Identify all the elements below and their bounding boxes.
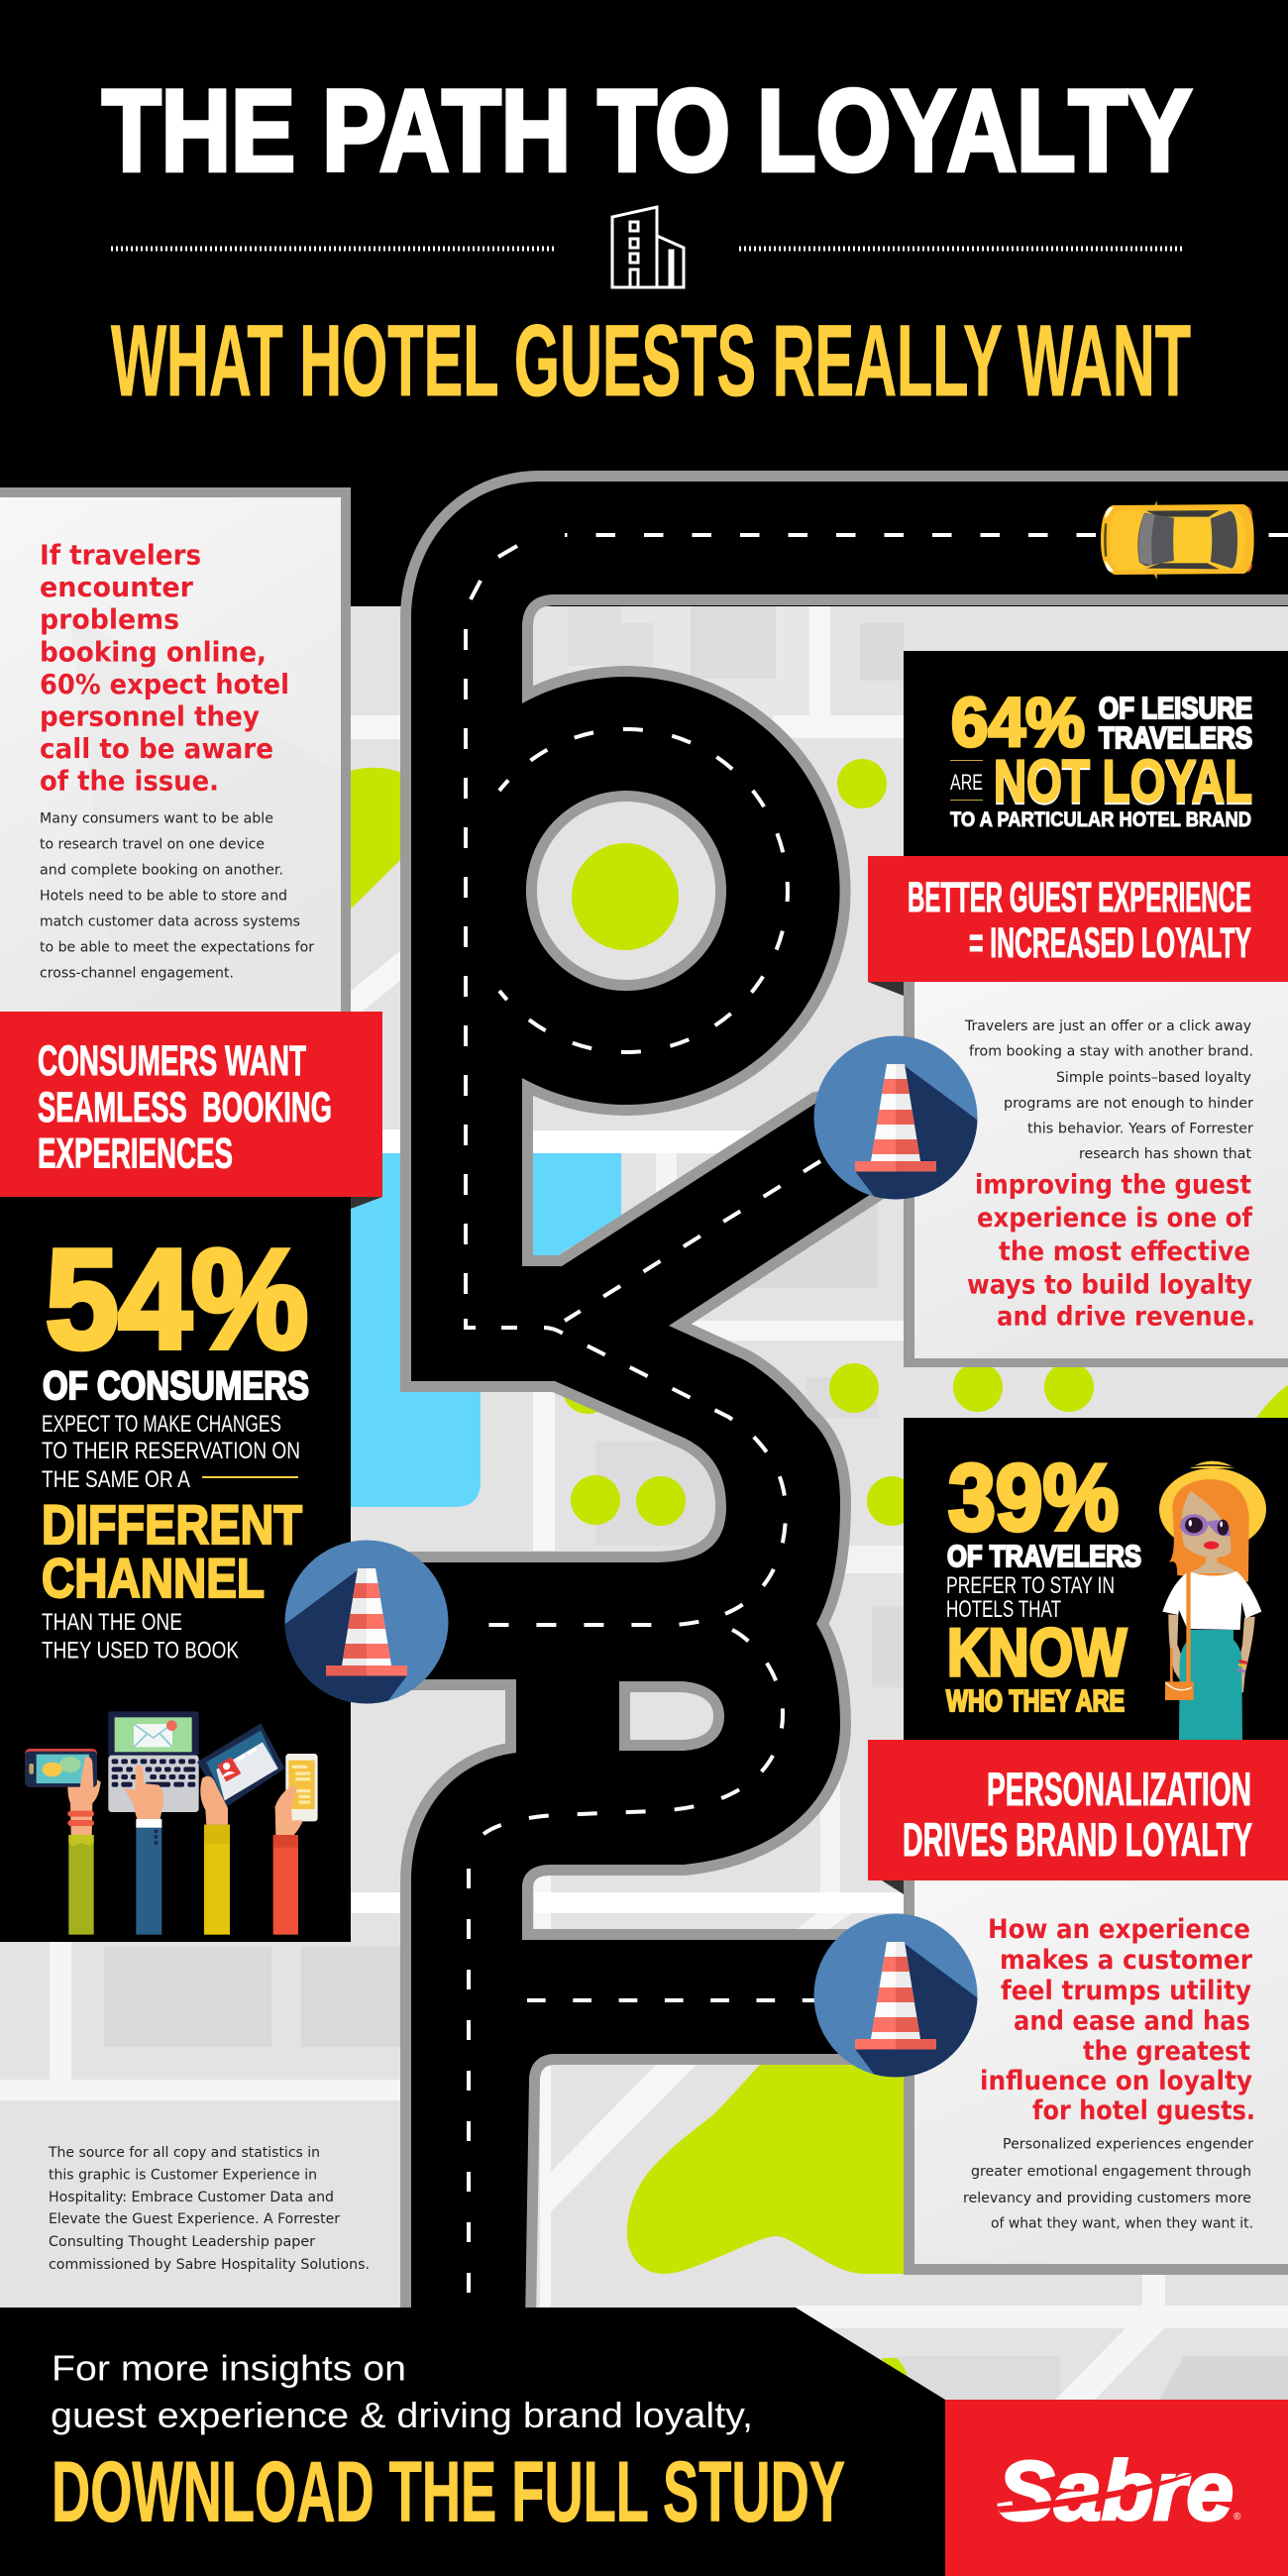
icon: traffic cone 1 <box>814 1036 985 1207</box>
callout text: the greatest <box>1083 2036 1250 2067</box>
panel: 54% stat: THAN THE ONE <box>42 1609 182 1636</box>
panel: 54% stat: DIFFERENT <box>42 1493 302 1556</box>
panel: 54% stat: EXPECT TO MAKE CHANGES <box>42 1411 281 1438</box>
water <box>351 1153 621 1507</box>
panel: seamless booking copy <box>0 487 351 1013</box>
logo: Sabre: Sabre <box>998 2444 1234 2537</box>
device: smartphone <box>275 1754 318 1835</box>
panel: 64% stat: OF LEISURE <box>1099 691 1252 725</box>
panel: 64% stat: 64% <box>951 684 1085 761</box>
footer call to action: guest experience & driving brand loyalty, <box>51 2395 753 2435</box>
body text: to research travel on one device <box>40 837 265 853</box>
panel: 54% stat: THE SAME OR A <box>42 1466 190 1493</box>
dotted divider <box>111 246 1184 252</box>
body text: Many consumers want to be able <box>40 811 273 827</box>
icon: traffic cone 3 <box>814 1914 985 2085</box>
device: laptop <box>108 1711 199 1819</box>
body text: programs are not enough to hinder <box>1004 1096 1253 1112</box>
red banner: better guest experience <box>868 856 1288 996</box>
body text: Travelers are just an offer or a click away <box>964 1019 1251 1034</box>
panel: 39% stat: HOTELS THAT <box>946 1596 1061 1623</box>
panel: personalization copy <box>904 1873 1288 2275</box>
callout text: experience is one of <box>977 1203 1252 1234</box>
body text: to be able to meet the expectations for <box>40 940 314 956</box>
body text: greater emotional engagement through <box>971 2164 1251 2180</box>
panel: 64% stat: TRAVELERS <box>1099 720 1252 755</box>
icon: traffic cone 2 <box>277 1540 448 1711</box>
footer call to action: DOWNLOAD THE FULL STUDY <box>52 2445 845 2540</box>
heading: travelers stat: 60% expect hotel <box>40 668 289 700</box>
heading: travelers stat <box>40 539 289 798</box>
source note: Hospitality: Embrace Customer Data and <box>49 2190 334 2205</box>
callout text: and drive revenue. <box>997 1302 1255 1333</box>
body text: this behavior. Years of Forrester <box>1027 1122 1253 1137</box>
callout text: makes a customer <box>1000 1945 1253 1976</box>
footer call to action: For more insights on <box>52 2348 406 2389</box>
panel: 54% stat: THEY USED TO BOOK <box>42 1637 239 1664</box>
red banner: consumers want: EXPERIENCES <box>38 1129 233 1177</box>
callout text <box>967 1169 1255 1333</box>
illustration: woman in sun hat <box>1159 1461 1266 1740</box>
heading: travelers stat: personnel they <box>40 699 260 733</box>
body text: from booking a stay with another brand. <box>969 1044 1253 1060</box>
body text: Personalized experiences engender <box>1003 2136 1253 2152</box>
red banner: personalization <box>868 1740 1288 1894</box>
road network <box>396 482 1288 2323</box>
red banner: consumers want: SEAMLESS BOOKING <box>38 1084 332 1131</box>
panel: 64% stat: ARE <box>950 770 983 795</box>
panel: 39% stat: PREFER TO STAY IN <box>946 1572 1115 1599</box>
logo: Sabre: ® <box>1234 2512 1241 2522</box>
source note <box>48 2145 370 2273</box>
body text: match customer data across systems <box>40 914 300 930</box>
body text: Hotels need to be able to store and <box>40 889 287 905</box>
source note: this graphic is Customer Experience in <box>49 2167 317 2183</box>
heading: travelers stat: of the issue. <box>40 765 219 798</box>
body text <box>964 1019 1253 1162</box>
callout text: How an experience <box>988 1914 1250 1945</box>
callout text: influence on loyalty <box>980 2066 1252 2096</box>
panel: 39% stat: OF TRAVELERS <box>947 1539 1141 1573</box>
heading: travelers stat: call to be aware <box>40 732 273 765</box>
icon: hands holding devices <box>25 1711 318 1935</box>
device: tablet <box>197 1723 285 1825</box>
source note: commissioned by Sabre Hospitality Solutions. <box>49 2257 370 2273</box>
body text: and complete booking on another. <box>40 863 283 879</box>
logo: Sabre <box>945 2400 1288 2576</box>
road centre dashes <box>466 535 1288 2308</box>
heading: travelers stat: If travelers <box>40 539 201 571</box>
icon: yellow taxi <box>1101 500 1254 580</box>
panel: 39% stat: 39% <box>948 1446 1119 1551</box>
map background <box>0 606 1288 2400</box>
body text: cross-channel engagement. <box>40 966 234 982</box>
icon: hotel building <box>612 207 684 287</box>
body text: Simple points–based loyalty <box>1056 1070 1251 1086</box>
panel: 39% stat: WHO THEY ARE <box>946 1683 1125 1718</box>
callout text: for hotel guests. <box>1032 2095 1255 2126</box>
panel: 54% stat <box>0 1197 351 1942</box>
panel: 54% stat: TO THEIR RESERVATION ON <box>42 1438 300 1464</box>
park blobs <box>351 759 1288 2380</box>
body text <box>963 2136 1253 2231</box>
body text: research has shown that <box>1079 1146 1251 1162</box>
body text <box>40 811 314 982</box>
arm: red sweater <box>273 1835 298 1935</box>
arm: olive <box>67 1777 101 1935</box>
arm: yellow <box>204 1825 230 1935</box>
source note: Elevate the Guest Experience. A Forrester <box>49 2211 340 2227</box>
panel: 64% stat <box>904 651 1288 856</box>
heading: travelers stat: encounter <box>40 571 193 603</box>
callout text: the most effective <box>999 1236 1250 1267</box>
panel: 54% stat: CHANNEL <box>42 1547 265 1609</box>
device: phone <box>25 1749 97 1791</box>
red banner: consumers want: CONSUMERS WANT <box>38 1037 306 1085</box>
panel: better guest experience copy <box>904 976 1288 1367</box>
source note: The source for all copy and statistics in <box>48 2145 320 2161</box>
callout text: improving the guest <box>975 1169 1251 1201</box>
panel: 39% stat <box>904 1418 1288 1740</box>
footer call to action <box>0 2308 945 2576</box>
red banner: consumers want <box>0 1012 382 1209</box>
callout text: and ease and has <box>1014 2005 1250 2037</box>
panel: 39% stat: KNOW <box>947 1615 1127 1690</box>
panel: 54% stat: 54% <box>46 1221 308 1378</box>
arm: navy suit <box>136 1819 161 1935</box>
callout text: feel trumps utility <box>1001 1976 1251 2006</box>
callout text <box>980 1914 1255 2126</box>
body text: of what they want, when they want it. <box>991 2215 1253 2231</box>
panel: 54% stat: OF CONSUMERS <box>43 1364 309 1408</box>
source note: Consulting Thought Leadership paper <box>49 2234 315 2250</box>
callout text: ways to build loyalty <box>967 1270 1252 1300</box>
body text: relevancy and providing customers more <box>963 2191 1251 2206</box>
heading: travelers stat: problems <box>40 603 179 636</box>
heading: travelers stat: booking online, <box>40 635 267 668</box>
